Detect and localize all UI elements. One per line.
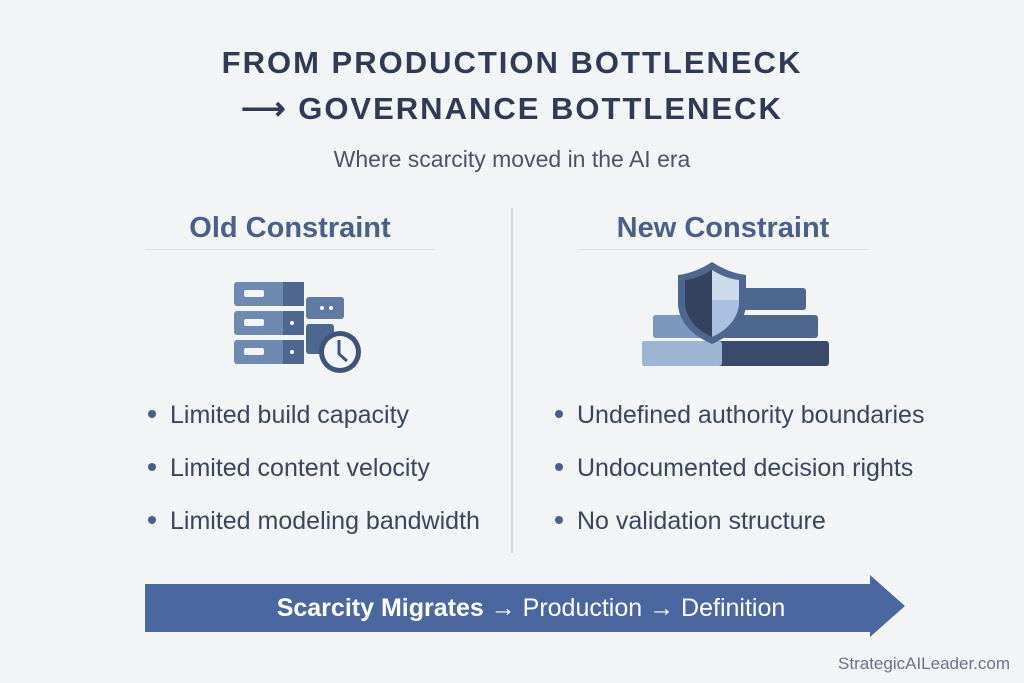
list: old constraints — [148, 401, 480, 535]
arrow: scarcity migrates: Scarcity Migrates → Production → Definition — [277, 594, 785, 622]
list: new constraints: Undocumented decision rights — [577, 454, 913, 482]
list: new constraints: Undefined authority boundaries — [577, 401, 924, 429]
list: old constraints: Limited modeling bandwidth — [170, 507, 480, 535]
title — [222, 45, 802, 126]
list: new constraints: No validation structure — [577, 507, 826, 535]
heading: new constraint: New Constraint — [617, 212, 829, 244]
title: FROM PRODUCTION BOTTLENECK — [222, 45, 802, 80]
divider — [511, 208, 513, 553]
footer: site name: StrategicAILeader.com — [838, 654, 1010, 673]
title: ⟶ GOVERNANCE BOTTLENECK — [241, 91, 783, 126]
heading: new constraint — [578, 212, 868, 250]
icon: server with clock — [234, 282, 361, 373]
heading: old constraint — [145, 212, 435, 250]
arrow: scarcity migrates — [145, 575, 905, 637]
list: new constraints — [555, 401, 924, 535]
icon: shield over layers — [642, 262, 829, 366]
heading: old constraint: Old Constraint — [189, 212, 391, 244]
list: old constraints: Limited content velocity — [170, 454, 430, 482]
list: old constraints: Limited build capacity — [170, 401, 409, 429]
subtitle: Where scarcity moved in the AI era — [334, 146, 690, 172]
